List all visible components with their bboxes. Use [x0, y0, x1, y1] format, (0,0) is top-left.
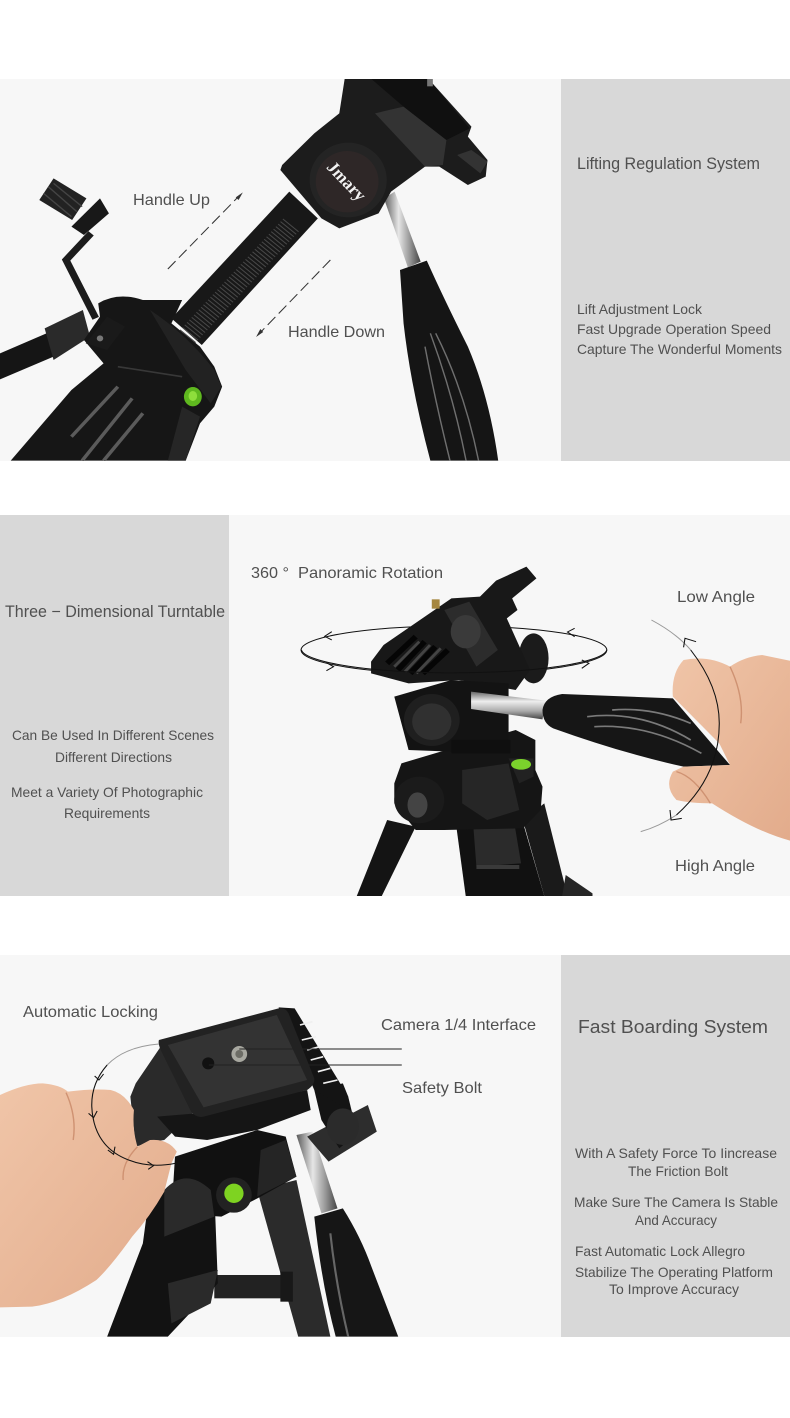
label: safety bolt: Safety Bolt — [402, 1080, 483, 1097]
label: handle down: Handle Down — [288, 324, 385, 341]
text block: lift adjustment description: Capture The Wonderful Moments — [577, 341, 782, 357]
label: automatic locking: Automatic Locking — [23, 1004, 158, 1021]
icon: rotation ellipse front arc and arrows — [301, 628, 607, 673]
arrow: locking arc — [89, 1044, 175, 1169]
heading: lifting regulation system: Lifting Regulation System — [577, 155, 760, 173]
label: handle up: Handle Up — [133, 192, 210, 209]
panel: lifting regulation photo — [0, 79, 498, 461]
label: panoramic rotation: Panoramic Rotation — [298, 565, 443, 582]
icon: rotation ellipse back — [301, 626, 607, 674]
icon: pan handle grip — [542, 694, 730, 767]
label: camera interface: Camera 1/4 Interface — [381, 1017, 536, 1034]
icon: head body and level — [164, 1130, 296, 1237]
text block: fast boarding description: Make Sure The Camera Is Stable — [574, 1194, 778, 1210]
text block: turntable description: Requirements — [64, 805, 150, 821]
icon: quick release lever — [130, 1047, 193, 1147]
icon: tripod base and legs — [11, 297, 222, 461]
icon: chrome rod — [384, 192, 421, 267]
heading: fast boarding system: Fast Boarding System — [578, 1017, 768, 1037]
panel: lifting regulation text — [561, 79, 790, 461]
arrow: tilt arc — [641, 620, 719, 832]
panel: turntable text — [0, 515, 229, 896]
text block: fast boarding description: With A Safety Force To Iincrease — [575, 1145, 777, 1161]
icon: chrome rod — [471, 692, 546, 719]
icon: pan head and plate — [371, 567, 549, 753]
text block: fast boarding description: Stabilize The Operating Platform — [575, 1264, 773, 1280]
icon: hand on lever — [0, 1083, 177, 1307]
icon: tripod legs and brace — [107, 1180, 330, 1337]
icon: pan handle grip — [314, 1208, 398, 1337]
panel: fast boarding text — [561, 955, 790, 1337]
icon: quick release plate — [157, 1007, 348, 1140]
icon: leg hub with level — [394, 730, 542, 830]
label: high angle: High Angle — [675, 858, 755, 875]
icon: tripod left arm — [0, 310, 90, 379]
panel: fast boarding photo — [0, 1006, 536, 1337]
text block: lift adjustment description: Fast Upgrade Operation Speed — [577, 321, 771, 337]
icon: hand gripping handle — [669, 655, 790, 842]
icon: tripod head — [280, 79, 487, 228]
icon: Jmary logo cap: Jmary — [323, 158, 370, 205]
arrow: handle up — [168, 192, 243, 269]
heading: three dimensional turntable: Three − Dimensional Turntable — [5, 603, 225, 621]
text block: turntable description: Meet a Variety Of Photographic — [11, 784, 203, 800]
text block: lift adjustment description — [577, 301, 782, 357]
icon: callout lines — [209, 1049, 402, 1065]
icon: right lock knob — [307, 1083, 377, 1162]
label: panoramic rotation: 360 ° — [251, 565, 289, 582]
icon: Jmary logo cap — [316, 151, 379, 212]
icon: crank handle — [39, 178, 109, 344]
text block: fast boarding description — [574, 1145, 778, 1297]
text block: fast boarding description: Fast Automatic Lock Allegro — [575, 1243, 745, 1259]
text block: fast boarding description: And Accuracy — [635, 1212, 717, 1228]
text block: lift adjustment description: Lift Adjustment Lock — [577, 301, 703, 317]
label: low angle: Low Angle — [677, 589, 755, 606]
text block: fast boarding description: To Improve Accuracy — [609, 1281, 739, 1297]
icon: elevator column — [171, 192, 318, 345]
text block: turntable description: Can Be Used In Different Scenes — [12, 727, 214, 743]
icon: chrome rod — [296, 1132, 337, 1213]
text block: fast boarding description: The Friction Bolt — [628, 1163, 728, 1179]
text block: turntable description — [11, 727, 214, 821]
panel: panoramic rotation photo — [252, 566, 790, 896]
icon: tripod legs — [357, 803, 592, 896]
text block: turntable description: Different Directions — [55, 749, 172, 765]
icon: pan handle grip — [400, 261, 498, 461]
arrow: handle down — [256, 260, 330, 337]
